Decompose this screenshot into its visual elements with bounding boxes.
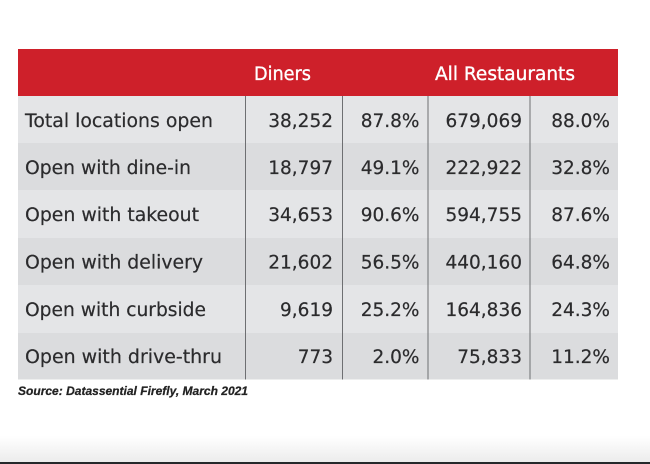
row: Open with curbside: 9,619 xyxy=(280,300,333,321)
row: Open with curbside: Open with curbside xyxy=(25,300,206,321)
row: Total locations open: Total locations open xyxy=(24,111,213,132)
row: Open with delivery: 21,602 xyxy=(268,252,333,274)
heading: All Restaurants: All Restaurants xyxy=(435,64,575,85)
row: Open with takeout: 594,755 xyxy=(445,205,522,226)
row: Open with delivery: 56.5% xyxy=(361,252,420,274)
row: Open with delivery: 64.8% xyxy=(551,252,610,274)
row: Open with takeout: 34,653 xyxy=(268,205,333,226)
row: Open with dine-in: 18,797 xyxy=(268,158,333,179)
row: Open with dine-in xyxy=(18,143,618,190)
row: Open with dine-in: 49.1% xyxy=(361,158,420,179)
row: Open with takeout: 87.6% xyxy=(551,205,610,226)
row: Open with dine-in: 222,922 xyxy=(445,158,522,179)
row: Open with drive-thru: Open with drive-thru xyxy=(25,347,222,368)
row: Open with takeout: Open with takeout xyxy=(25,205,199,226)
row: Open with delivery: 440,160 xyxy=(445,252,522,274)
row: Open with curbside: 24.3% xyxy=(551,300,610,321)
row: Open with takeout xyxy=(18,190,618,238)
row: Open with dine-in: Open with dine-in xyxy=(25,158,191,179)
row: Open with delivery: Open with delivery xyxy=(25,252,203,274)
row: Open with curbside: 164,836 xyxy=(445,300,522,321)
row: Total locations open xyxy=(18,96,618,143)
row: Open with drive-thru: 75,833 xyxy=(457,347,522,368)
row: Total locations open: 87.8% xyxy=(361,111,420,132)
row: Open with curbside xyxy=(18,285,618,333)
table xyxy=(18,49,618,380)
table header band xyxy=(18,49,618,96)
row: Open with drive-thru: 11.2% xyxy=(551,347,610,368)
row: Open with delivery xyxy=(18,238,618,285)
row: Open with drive-thru: 773 xyxy=(298,347,333,368)
row: Total locations open: 38,252 xyxy=(268,111,333,132)
row: Total locations open: 679,069 xyxy=(445,111,522,132)
row: Open with drive-thru xyxy=(18,333,618,380)
row: Open with drive-thru: 2.0% xyxy=(372,347,420,368)
row: Open with takeout: 90.6% xyxy=(361,205,420,226)
row: Open with curbside: 25.2% xyxy=(361,300,420,321)
source note: Source: Datassential Firefly, March 2021 xyxy=(18,384,248,398)
heading: Diners: Diners xyxy=(254,64,311,85)
row: Open with dine-in: 32.8% xyxy=(551,158,610,179)
row: Total locations open: 88.0% xyxy=(551,111,610,132)
